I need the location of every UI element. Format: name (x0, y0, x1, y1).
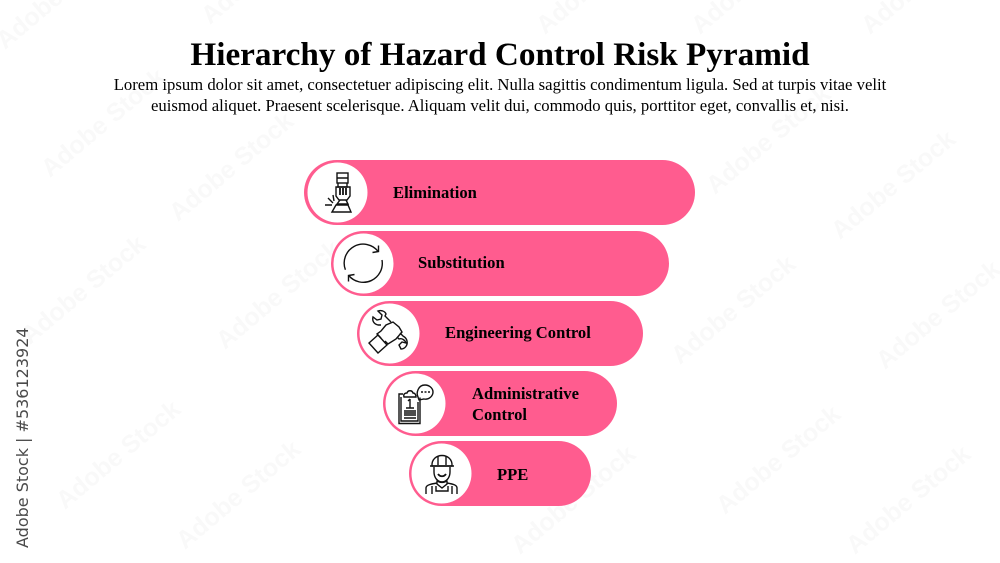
label: Control (472, 405, 527, 424)
label: Substitution (418, 253, 505, 272)
text: Adobe Stock (16, 230, 151, 350)
panel: elimination (304, 160, 695, 225)
text: Adobe Stock (826, 125, 961, 245)
text: Adobe Stock (711, 400, 846, 520)
text: Adobe Stock (51, 395, 186, 515)
text: Adobe Stock (841, 440, 976, 560)
text: Adobe Stock (171, 435, 306, 555)
text: Adobe Stock (506, 440, 641, 560)
text: Adobe Stock (211, 235, 346, 355)
panel: engineering control (357, 301, 643, 366)
label: PPE (497, 465, 528, 484)
text: Adobe Stock (701, 80, 836, 200)
icon: circular arrows (344, 244, 382, 282)
icon: hand with welding tool (325, 173, 351, 212)
label: Engineering Control (445, 323, 591, 342)
icon: worker with helmet (426, 456, 457, 494)
label: Administrative (472, 384, 579, 403)
icon: clipboard with speech bubble (399, 385, 433, 424)
panel: administrative control (383, 371, 617, 436)
text: Adobe Stock (666, 250, 801, 370)
text: Adobe Stock (36, 63, 171, 183)
title: Hierarchy of Hazard Control Risk Pyramid (190, 36, 810, 73)
text: Adobe Stock (164, 107, 299, 227)
subtitle text block: Lorem ipsum dolor sit amet, consectetuer adipiscing elit. Nulla sagittis condimentum ligula. Sed at turpis vitae velit (114, 75, 886, 94)
panel: ppe (409, 441, 591, 506)
icon: hand with wrench (369, 311, 407, 353)
label: Elimination (393, 183, 477, 202)
credit: vertical stock id: Adobe Stock | #536123924 (13, 327, 32, 548)
subtitle text block (114, 75, 886, 115)
panel: substitution (331, 231, 669, 296)
subtitle text block: euismod aliquet. Praesent scelerisque. Aliquam velit dui, commodo quis, porttitor eget, convallis et, nisi. (151, 96, 849, 115)
